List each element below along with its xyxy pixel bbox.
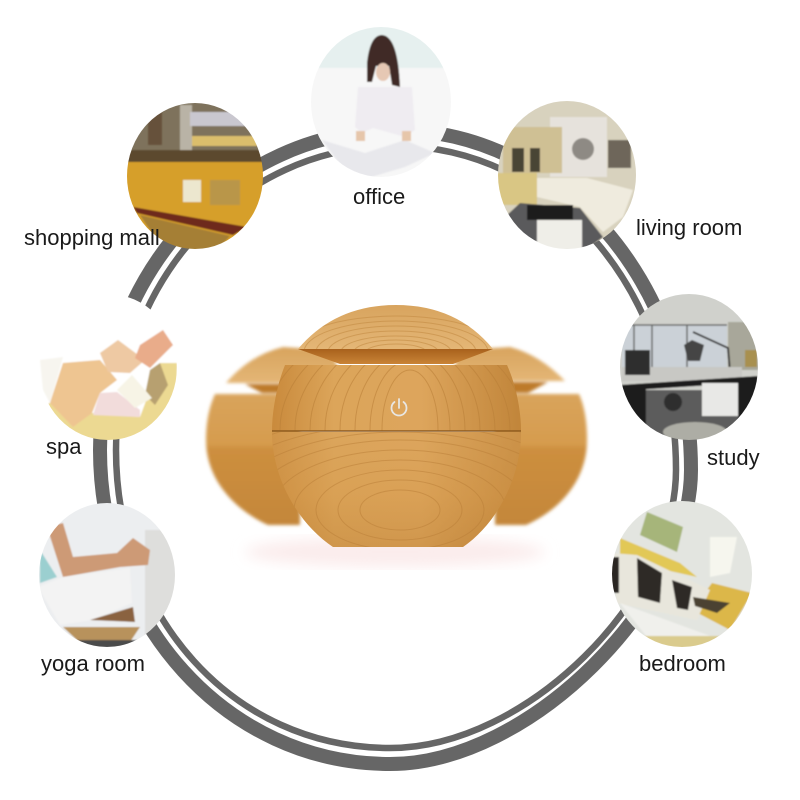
label: office: office (353, 184, 405, 209)
icon: power button (392, 399, 407, 416)
front diffuser upper body (272, 365, 521, 431)
product: wooden diffusers (204, 305, 590, 568)
photo: study (618, 292, 760, 442)
label: yoga room: yoga room (41, 651, 145, 676)
label: study: study (707, 445, 760, 470)
reflection (245, 537, 545, 567)
photo: bedroom (610, 498, 755, 650)
photo: shopping mall (125, 100, 267, 252)
label: living room: living room (636, 215, 742, 240)
photo: yoga room (35, 500, 180, 650)
back left diffuser (206, 347, 345, 525)
photo: spa (35, 292, 180, 442)
photo: living room (495, 100, 640, 252)
front diffuser lower body (272, 432, 521, 547)
front diffuser seam (272, 430, 521, 432)
back right diffuser (450, 347, 587, 525)
ring: outer and inner gray bands (100, 130, 691, 764)
label: bedroom: bedroom (639, 651, 726, 676)
label: shopping mall: shopping mall (24, 225, 160, 250)
label: spa: spa (46, 434, 82, 459)
photo: office (318, 27, 447, 176)
front diffuser mist slit (298, 349, 493, 364)
front diffuser lid (298, 305, 493, 349)
